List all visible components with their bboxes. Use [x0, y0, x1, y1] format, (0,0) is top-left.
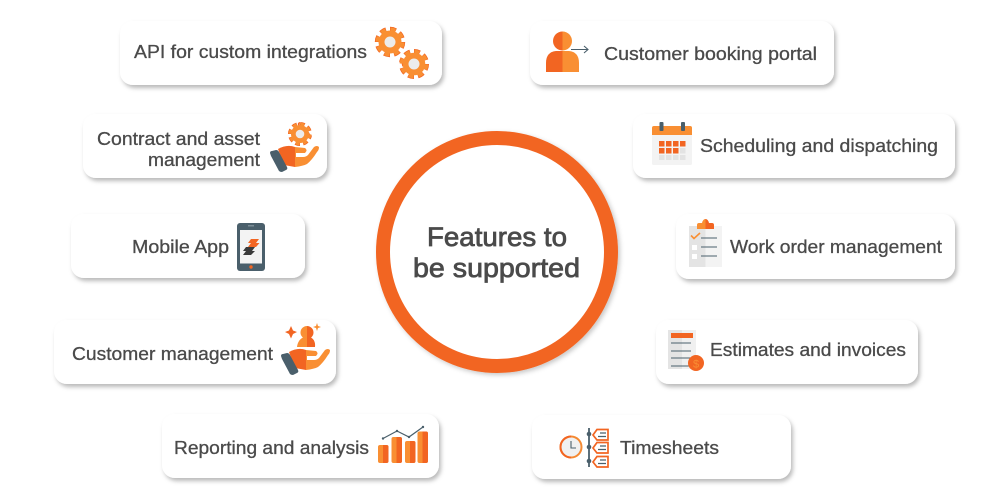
icon: hand holding gear [270, 124, 319, 172]
card: Customer booking portal [530, 21, 834, 85]
label: Customer booking portal [604, 43, 817, 64]
central circle: Features to be supported [383, 138, 611, 366]
card: Estimates and invoices [656, 320, 918, 384]
icon: clock with timeline tags [560, 428, 608, 467]
card: API for custom integrations [120, 21, 442, 85]
card: Scheduling and dispatching [633, 114, 955, 178]
icon: smartphone [237, 223, 265, 271]
card: Contract and asset management [83, 114, 327, 178]
icon: invoice with coin [668, 330, 704, 371]
label: Contract and asset [97, 128, 260, 149]
icon: hand holding person with sparkles [281, 323, 330, 375]
label: Reporting and analysis [174, 437, 369, 458]
label: management [148, 149, 260, 170]
circle heading: be supported [413, 253, 580, 283]
icon: clipboard checklist [689, 219, 722, 267]
icon: invoice with coin: $ [693, 358, 699, 370]
card: Mobile App [71, 214, 305, 278]
label [97, 128, 260, 170]
label: Estimates and invoices [710, 339, 906, 360]
circle heading: Features to [427, 222, 567, 252]
icon: calendar [652, 122, 692, 165]
icon: person with arrow [546, 32, 588, 72]
card: Reporting and analysis [162, 414, 439, 478]
icon: bar chart with trend line [378, 426, 428, 463]
card: Work order management [676, 214, 955, 279]
icon: two gears [378, 30, 426, 76]
label: Customer management [72, 343, 273, 364]
label: Work order management [730, 236, 942, 257]
circle heading [413, 222, 580, 283]
card: Timesheets [532, 415, 791, 479]
label: Scheduling and dispatching [700, 135, 938, 156]
label: API for custom integrations [134, 41, 367, 62]
label: Timesheets [620, 437, 719, 458]
card: Customer management [54, 320, 336, 384]
label: Mobile App [132, 236, 229, 257]
